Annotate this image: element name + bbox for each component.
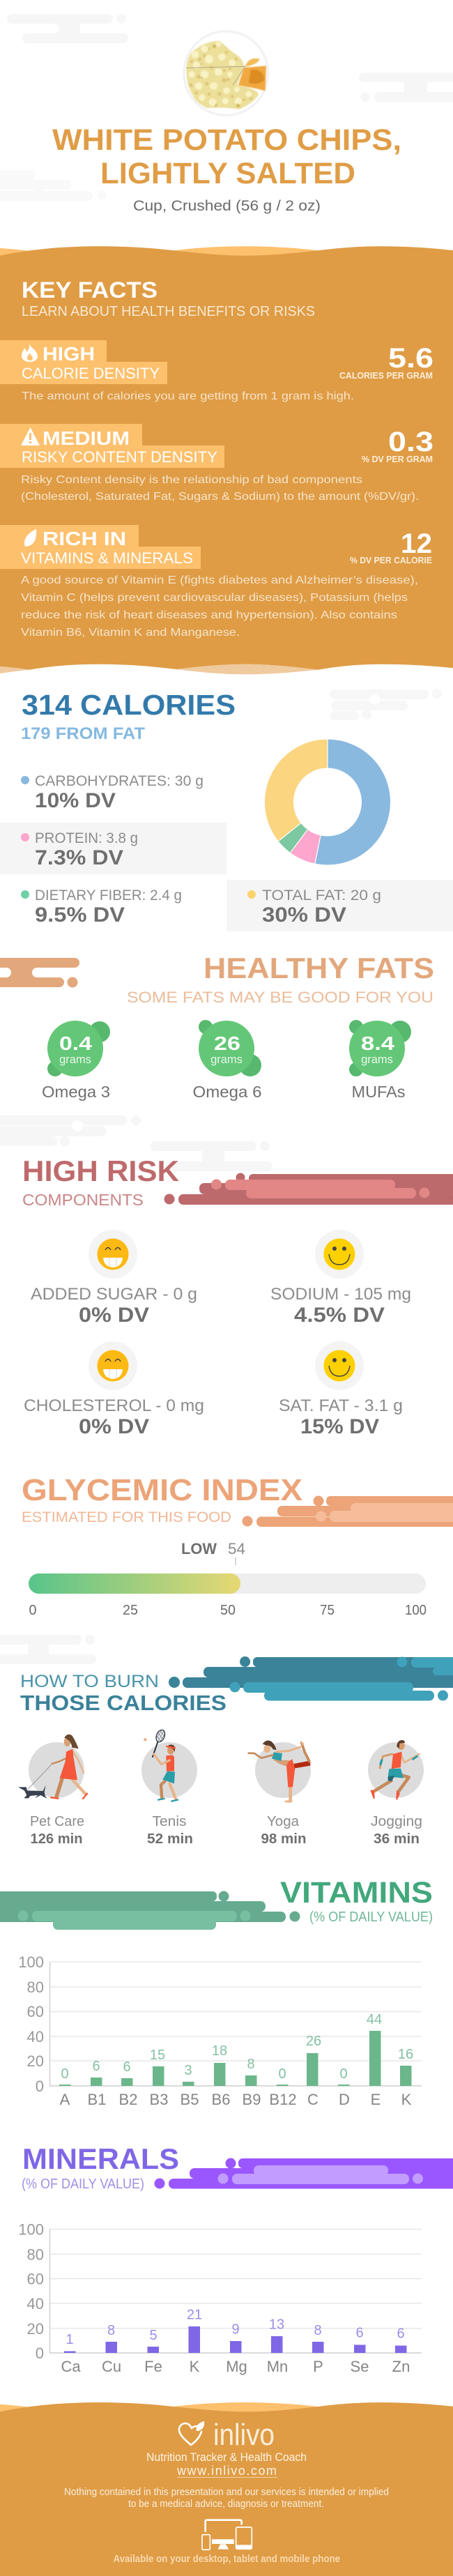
vitamins heading — [280, 1876, 433, 1925]
burn calories heading: HOW TO BURN — [20, 1672, 159, 1691]
fact: high calorie density — [0, 340, 433, 402]
fact: high calorie density: HIGH — [43, 343, 95, 365]
bar chart: minerals: 80 — [27, 2246, 44, 2263]
bar chart: minerals: Ca — [61, 2358, 81, 2375]
risk item: added sugar: ADDED SUGAR - 0 g — [31, 1285, 197, 1304]
bar chart: minerals: 6 — [355, 2326, 364, 2341]
activity: pet care: Pet Care — [30, 1814, 84, 1829]
bar chart: vitamins: 26 — [306, 2034, 321, 2049]
activity: yoga: 98 min — [261, 1831, 307, 1847]
activity: jogging: Jogging — [371, 1814, 422, 1829]
bar chart: minerals: 21 — [187, 2308, 202, 2323]
fact: high calorie density: The amount of calories you are getting from 1 gram is high. — [22, 390, 354, 402]
bar chart: vitamins: 15 — [150, 2048, 165, 2063]
bar chart: vitamins: 0 — [61, 2066, 69, 2082]
website link: www.inlivo.com — [176, 2464, 277, 2478]
background cloud: burn calories — [0, 1635, 98, 1664]
disclaimer — [64, 2487, 389, 2510]
high risk heading: HIGH RISK — [22, 1154, 179, 1187]
fact: rich in vitamins and minerals: Vitamin B6, Vitamin K and Manganese. — [21, 627, 240, 639]
fat badge: omega 3: Omega 3 — [42, 1083, 110, 1101]
logo: inlivo heart and leaf: inlivo — [213, 2418, 275, 2452]
fact: high calorie density: CALORIE DENSITY — [22, 365, 160, 382]
icon: grinning face — [98, 1238, 128, 1270]
glycemic index heading: GLYCEMIC INDEX — [22, 1473, 302, 1507]
title — [52, 123, 401, 190]
disclaimer: to be a medical advice, diagnosis or treatment. — [128, 2499, 324, 2510]
healthy fats heading — [127, 952, 434, 1006]
fat badge: MUFAs: MUFAs — [351, 1083, 406, 1101]
bar chart: minerals: Mg — [226, 2358, 247, 2375]
fact: medium risky content density: % DV PER GRAM — [362, 455, 433, 464]
activity: tennis — [141, 1729, 197, 1847]
bar chart: vitamins — [18, 1953, 422, 2108]
fact: medium risky content density — [0, 424, 433, 503]
bar chart: vitamins: 44 — [367, 2012, 382, 2027]
macro: total fat: 30% DV — [262, 904, 346, 927]
fact: high calorie density: CALORIES PER GRAM — [339, 371, 433, 381]
burn calories decoration — [169, 1656, 453, 1701]
activity: yoga — [249, 1740, 311, 1847]
macro: dietary fiber: 9.5% DV — [35, 904, 125, 927]
bar chart: vitamins: 6 — [123, 2059, 131, 2075]
calories heading: 314 CALORIES — [22, 689, 236, 721]
bar chart: vitamins: B1 — [88, 2091, 106, 2108]
background clouds: high risk — [0, 1115, 272, 1171]
bar chart: vitamins: 3 — [184, 2063, 192, 2078]
calories heading: 179 FROM FAT — [21, 724, 145, 743]
minerals decoration — [155, 2158, 453, 2189]
risk item: saturated fat — [279, 1341, 403, 1438]
fact: rich in vitamins and minerals: VITAMINS & MINERALS — [21, 549, 193, 567]
minerals heading: MINERALS — [22, 2142, 179, 2175]
bar chart: minerals: 0 — [36, 2345, 44, 2362]
fat badge: omega 3 — [42, 1021, 110, 1101]
bar chart: vitamins: B5 — [181, 2091, 199, 2108]
bar chart: minerals: Zn — [392, 2358, 410, 2375]
glycemic index gauge — [29, 1540, 427, 1618]
glycemic index gauge: 100 — [405, 1603, 427, 1618]
risk item: added sugar: 0% DV — [79, 1304, 149, 1327]
macro: total fat: TOTAL FAT: 20 g — [262, 887, 381, 904]
background clouds: header — [0, 14, 453, 201]
healthy fats heading: SOME FATS MAY BE GOOD FOR YOU — [127, 989, 433, 1006]
fat badge: MUFAs: grams — [361, 1053, 393, 1066]
bar chart: minerals: Cu — [102, 2358, 121, 2375]
bar chart: minerals: Fe — [144, 2358, 162, 2375]
bar chart: vitamins: 16 — [398, 2047, 413, 2062]
bar chart: minerals: 1 — [66, 2332, 74, 2347]
glycemic index gauge: 25 — [123, 1603, 138, 1618]
glycemic index heading: ESTIMATED FOR THIS FOOD — [22, 1509, 231, 1525]
high risk decoration — [164, 1173, 453, 1205]
risk item: saturated fat: 15% DV — [300, 1415, 379, 1438]
disclaimer: Nothing contained in this presentation and our services is intended or implied — [64, 2487, 389, 2498]
fact: rich in vitamins and minerals: reduce the risk of heart diseases and hypertension). Also contains — [21, 609, 397, 621]
bar chart: vitamins: B9 — [243, 2091, 261, 2108]
bar chart: minerals: 20 — [27, 2320, 44, 2338]
high risk heading: COMPONENTS — [22, 1191, 144, 1209]
bar chart: minerals: 9 — [231, 2322, 240, 2337]
macro: carbohydrates: CARBOHYDRATES: 30 g — [35, 773, 204, 789]
bar chart: vitamins: K — [401, 2091, 412, 2108]
bar chart: vitamins: B12 — [269, 2091, 297, 2108]
key facts heading: LEARN ABOUT HEALTH BENEFITS OR RISKS — [22, 304, 315, 319]
fact: rich in vitamins and minerals — [0, 525, 432, 639]
icon: smiling face — [323, 1350, 355, 1382]
fact: rich in vitamins and minerals: % DV PER CALORIE — [350, 556, 432, 565]
activity: tennis: Tenis — [152, 1814, 187, 1829]
macro: protein: PROTEIN: 3.8 g — [35, 830, 138, 846]
fact: rich in vitamins and minerals: 12 — [401, 528, 432, 559]
bar chart: vitamins: 0 — [278, 2066, 286, 2082]
risk item: sodium: 4.5% DV — [294, 1304, 385, 1327]
burn calories heading: THOSE CALORIES — [20, 1691, 227, 1715]
bar chart: vitamins: 100 — [18, 1953, 44, 1971]
activity: tennis: 52 min — [147, 1831, 193, 1847]
glycemic index gauge: 75 — [320, 1603, 335, 1618]
macro: carbohydrates: 10% DV — [35, 789, 116, 812]
activity: jogging: 36 min — [374, 1831, 420, 1847]
activity: pet care — [18, 1735, 87, 1847]
bar chart: minerals: 100 — [18, 2221, 44, 2239]
title: WHITE POTATO CHIPS, — [52, 123, 401, 157]
icon: runner — [371, 1740, 420, 1799]
risk item: added sugar — [31, 1230, 197, 1327]
bar chart: minerals: 8 — [107, 2323, 115, 2338]
serving size: Cup, Crushed (56 g / 2 oz) — [133, 197, 321, 214]
icon: yoga pose — [249, 1740, 310, 1803]
bar chart: vitamins: E — [371, 2091, 381, 2108]
bar chart: minerals: P — [313, 2358, 323, 2375]
fact: rich in vitamins and minerals: RICH IN — [43, 528, 126, 549]
bar chart: vitamins: B2 — [119, 2091, 137, 2108]
macro: dietary fiber: DIETARY FIBER: 2.4 g — [35, 887, 182, 904]
bar chart: minerals: Se — [351, 2358, 369, 2375]
fact: medium risky content density: MEDIUM — [43, 427, 130, 449]
fat badge: omega 6: Omega 6 — [192, 1083, 262, 1101]
panel: footer — [0, 2402, 453, 2576]
icon: warning triangle — [21, 427, 40, 445]
key facts heading — [22, 277, 315, 319]
bar chart: vitamins: 80 — [27, 1979, 44, 1996]
macro: protein — [0, 823, 227, 874]
glycemic index gauge: LOW — [181, 1540, 217, 1557]
bar chart: minerals: 60 — [27, 2270, 44, 2288]
activity: pet care: 126 min — [31, 1831, 82, 1847]
icon: flame — [22, 344, 38, 362]
high risk heading — [22, 1154, 179, 1209]
bar chart: minerals: 13 — [269, 2317, 284, 2333]
icon: smiling face — [323, 1238, 355, 1270]
bar chart: vitamins: 6 — [92, 2059, 100, 2074]
bar chart: minerals: 40 — [27, 2295, 44, 2312]
fact: medium risky content density: Risky Content density is the relationship of bad components — [21, 474, 362, 486]
fact: rich in vitamins and minerals: Vitamin C (helps prevent cardiovascular diseases), Potassium (helps — [21, 592, 408, 604]
bar chart: vitamins: 40 — [27, 2028, 44, 2045]
bar chart: vitamins: 18 — [212, 2043, 227, 2059]
fact: high calorie density: 5.6 — [388, 343, 433, 374]
icon: tennis player — [144, 1729, 178, 1801]
risk item: saturated fat: SAT. FAT - 3.1 g — [279, 1396, 403, 1415]
fact: medium risky content density: (Cholesterol, Saturated Fat, Sugars & Sodium) to the amount (%DV/gr). — [21, 491, 419, 503]
glycemic index heading — [22, 1473, 302, 1525]
title: LIGHTLY SALTED — [100, 157, 355, 190]
icon: desktop, tablet and phone — [202, 2520, 252, 2550]
fat badge: omega 6: grams — [210, 1053, 243, 1066]
fact: rich in vitamins and minerals: A good source of Vitamin E (fights diabetes and Alzheimer’s disease), — [21, 574, 418, 586]
fat badge: omega 3: 0.4 — [59, 1032, 92, 1054]
bar chart: vitamins: 60 — [27, 2003, 44, 2020]
minerals heading: (% OF DAILY VALUE) — [22, 2177, 144, 2192]
fat badge: omega 3: grams — [59, 1053, 91, 1066]
vitamins heading: VITAMINS — [280, 1876, 433, 1910]
bar chart: minerals: 5 — [149, 2328, 158, 2343]
vitamins heading: (% OF DAILY VALUE) — [309, 1910, 433, 1925]
icon: grinning face — [98, 1350, 128, 1382]
donut chart: macronutrients — [279, 739, 376, 863]
bar chart: vitamins: 8 — [247, 2057, 255, 2072]
vitamins decoration — [0, 1891, 300, 1930]
logo: inlivo heart and leaf — [179, 2418, 275, 2452]
bar chart: vitamins: B3 — [150, 2091, 168, 2108]
macro: dietary fiber — [21, 887, 182, 927]
risk item: cholesterol: CHOLESTEROL - 0 mg — [24, 1396, 204, 1415]
bar chart: vitamins: 0 — [339, 2066, 348, 2082]
fat badge: MUFAs — [349, 1020, 411, 1101]
glycemic index decoration — [243, 1496, 453, 1527]
fact: medium risky content density: RISKY CONTENT DENSITY — [22, 448, 217, 466]
healthy fats heading: HEALTHY FATS — [204, 952, 434, 984]
panel: key facts background — [0, 246, 453, 674]
risk item: sodium — [270, 1230, 411, 1327]
footer wave back layer — [0, 2402, 318, 2423]
fat badge: MUFAs: 8.4 — [361, 1032, 395, 1054]
bar chart: vitamins: C — [307, 2091, 318, 2108]
fat badge: omega 6 — [192, 1020, 262, 1101]
fact: medium risky content density: 0.3 — [388, 427, 433, 457]
bar chart: vitamins: B6 — [212, 2091, 230, 2108]
tagline: Nutrition Tracker & Health Coach — [146, 2451, 307, 2464]
bar chart: minerals: K — [190, 2358, 200, 2375]
icon: leaf — [24, 529, 36, 547]
healthy fats decoration — [0, 958, 79, 987]
activity: jogging — [368, 1740, 424, 1847]
burn calories heading — [20, 1672, 227, 1715]
macro: protein: 7.3% DV — [35, 846, 123, 869]
activity: yoga: Yoga — [267, 1814, 300, 1829]
macro: total fat — [227, 880, 453, 931]
macro: carbohydrates — [21, 773, 204, 812]
key facts heading: KEY FACTS — [22, 277, 158, 303]
risk item: cholesterol: 0% DV — [79, 1415, 149, 1438]
bar chart: vitamins: A — [60, 2091, 70, 2108]
risk item: sodium: SODIUM - 105 mg — [270, 1285, 411, 1304]
availability note: Available on your desktop, tablet and mobile phone — [113, 2554, 340, 2565]
glycemic index gauge: 54 — [228, 1540, 245, 1557]
food photo: popcorn and chips in a bowl — [184, 31, 268, 115]
glycemic index gauge: 50 — [220, 1603, 236, 1618]
glycemic index gauge: 0 — [29, 1603, 36, 1618]
bar chart: vitamins: 20 — [27, 2052, 44, 2070]
bar chart: minerals: 8 — [314, 2323, 322, 2338]
bar chart: minerals — [18, 2221, 422, 2375]
fat badge: omega 6: 26 — [214, 1032, 240, 1054]
bar chart: minerals: 6 — [397, 2326, 405, 2342]
calories heading — [21, 689, 236, 743]
risk item: cholesterol — [24, 1341, 204, 1438]
icon: woman walking dog — [18, 1735, 87, 1799]
background cloud: calories — [330, 689, 442, 720]
bar chart: vitamins: 0 — [36, 2078, 44, 2095]
bar chart: minerals: Mn — [267, 2358, 288, 2375]
minerals heading — [22, 2142, 179, 2192]
footer background — [0, 2402, 453, 2576]
bar chart: vitamins: D — [339, 2091, 350, 2108]
